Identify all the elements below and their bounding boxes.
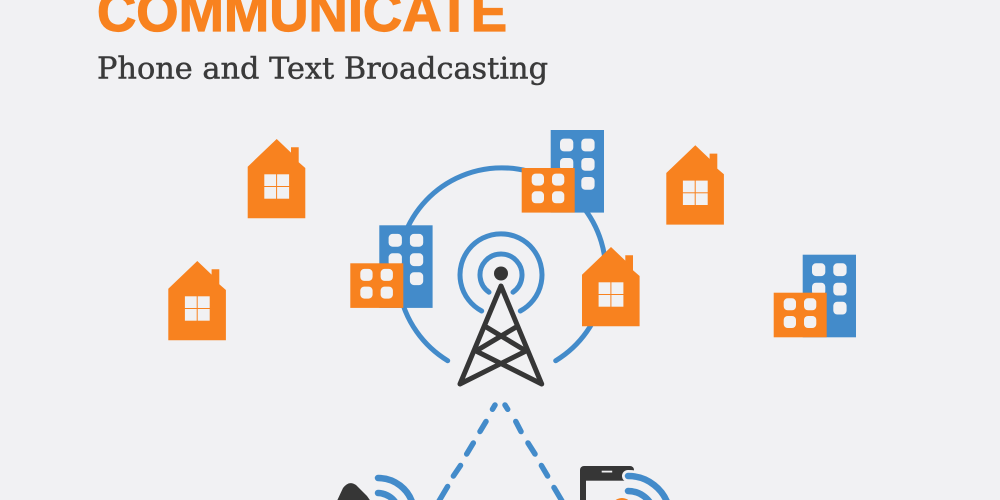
icon: phone with signal arcs — [580, 466, 669, 500]
icon: building top of circle — [522, 130, 604, 213]
icon: house far left — [168, 261, 226, 340]
coverage circle — [398, 168, 606, 361]
dashed signal lines — [439, 405, 562, 500]
icon: house inside circle — [582, 247, 640, 326]
icon: house top right — [666, 145, 724, 225]
subtitle: Phone and Text Broadcasting — [97, 52, 548, 86]
icon: broadcast tower — [460, 234, 542, 384]
icon: house top left — [248, 139, 305, 218]
icon: building left of circle — [350, 225, 433, 308]
icon: speaker with signal arcs — [336, 478, 413, 500]
icon: building far right — [774, 255, 856, 337]
